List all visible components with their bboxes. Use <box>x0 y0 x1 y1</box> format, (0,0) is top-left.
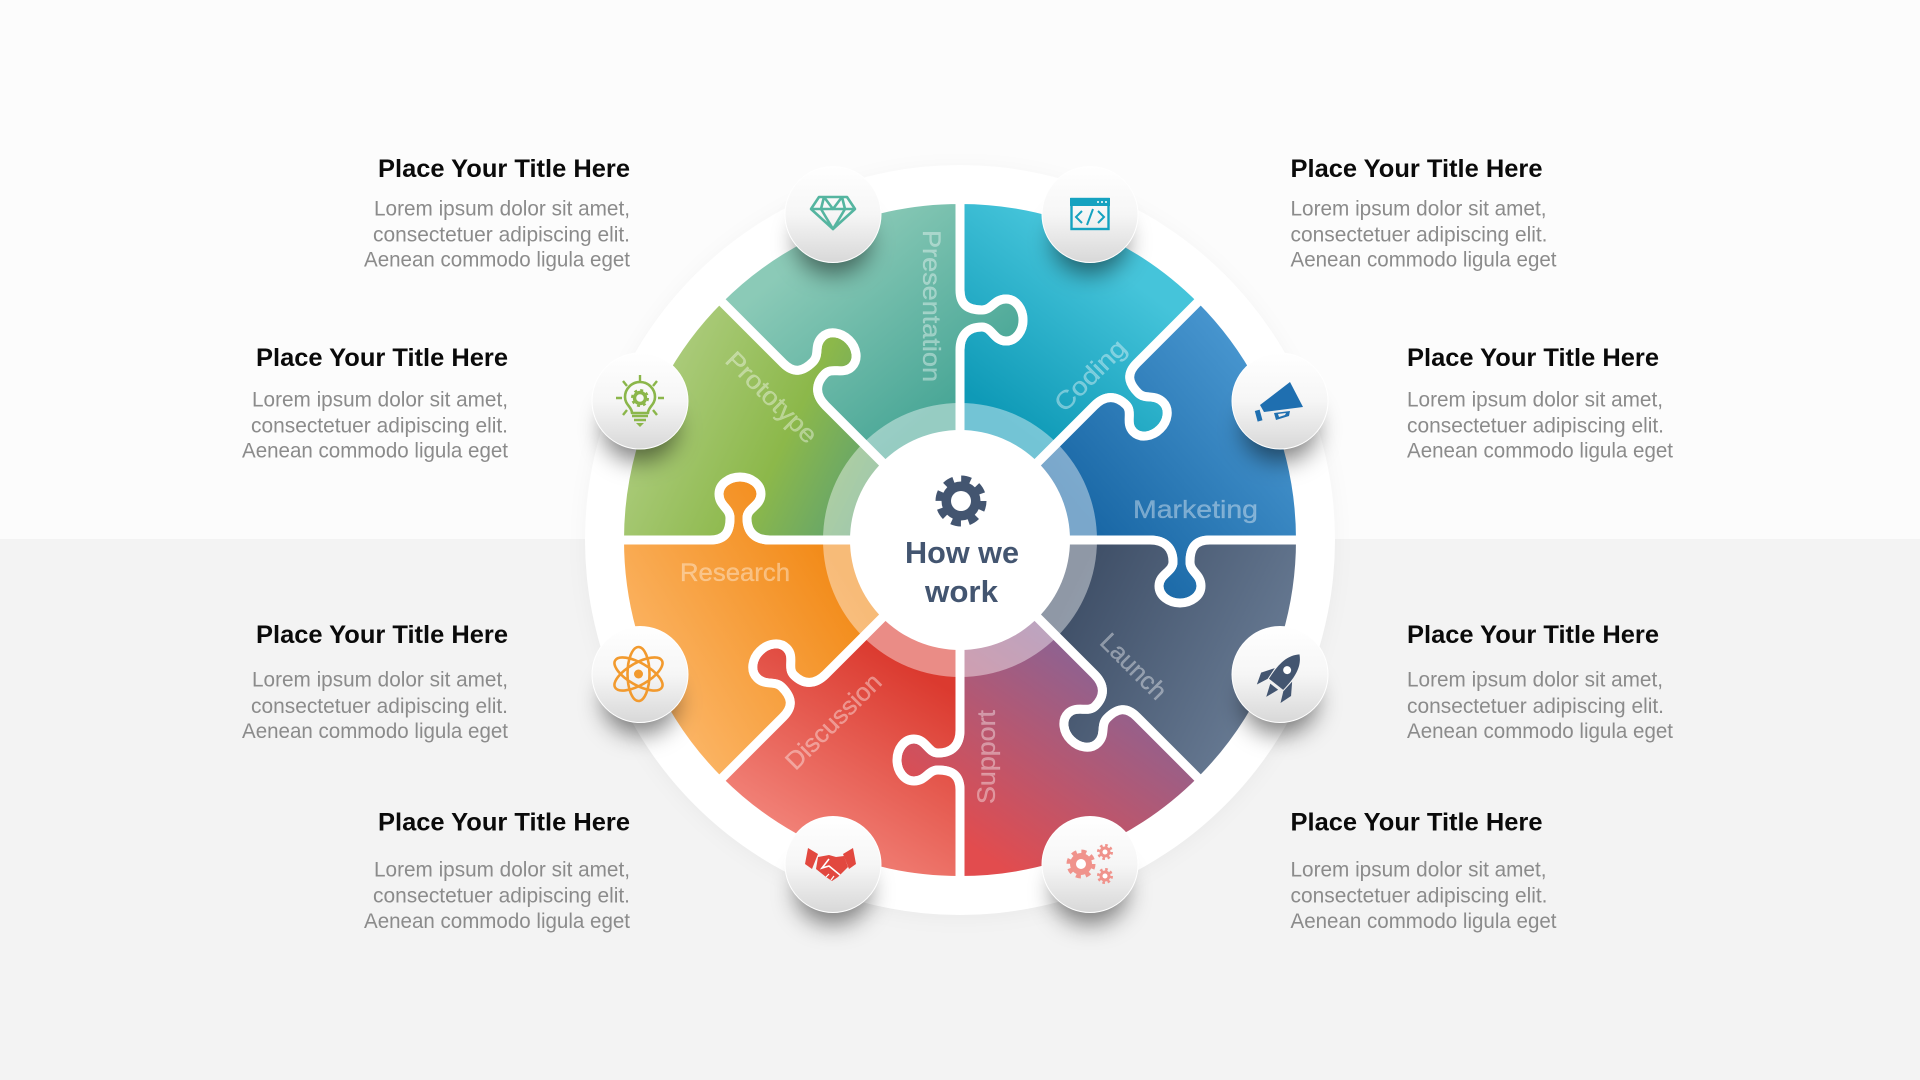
text block: upper left: Lorem ipsum dolor sit amet, <box>252 388 508 412</box>
text block: upper right: Place Your Title Here <box>1407 344 1659 372</box>
button: rocket <box>1232 626 1328 734</box>
text block: bottom left: consectetuer adipiscing elit. <box>373 884 630 908</box>
button: megaphone <box>1232 353 1328 461</box>
icon: megaphone <box>1255 382 1303 422</box>
icon: rocket <box>1251 643 1314 709</box>
text block: upper right: Aenean commodo ligula eget <box>1407 440 1673 462</box>
text block: top left: Place Your Title Here <box>378 155 630 183</box>
text block: bottom right <box>1290 808 1557 933</box>
text block: bottom right: consectetuer adipiscing elit. <box>1290 884 1548 908</box>
text block: lower left <box>242 621 508 743</box>
icon: handshake <box>805 848 856 881</box>
button: atom <box>592 626 688 734</box>
text block: lower left: Place Your Title Here <box>256 621 508 649</box>
button: handshake <box>785 816 881 924</box>
button: light bulb <box>592 353 688 461</box>
piece: support <box>790 540 1201 951</box>
text block: bottom left: Place Your Title Here <box>378 808 630 836</box>
text block: bottom left: Lorem ipsum dolor sit amet, <box>374 858 630 882</box>
text block: lower right: consectetuer adipiscing elit. <box>1407 695 1664 718</box>
text block: lower right: Aenean commodo ligula eget <box>1407 720 1673 743</box>
button: diamond <box>785 166 881 274</box>
piece: launch <box>960 540 1300 781</box>
piece: research <box>549 370 960 781</box>
text block: bottom left: Aenean commodo ligula eget <box>364 910 630 933</box>
text block: bottom left <box>364 808 630 933</box>
text block: top right: Place Your Title Here <box>1290 155 1543 183</box>
text block: top left: Lorem ipsum dolor sit amet, <box>374 198 630 220</box>
text block: upper right <box>1407 344 1673 462</box>
text block: bottom right: Place Your Title Here <box>1290 808 1543 836</box>
center hub: work <box>924 574 999 609</box>
label: marketing: Marketing <box>1133 496 1258 524</box>
label: support: Support <box>973 710 1001 804</box>
text block: top right <box>1290 155 1557 272</box>
text block: upper right: consectetuer adipiscing elit. <box>1407 414 1664 438</box>
piece: prototype <box>620 299 960 540</box>
label: discussion: Discussion <box>780 668 887 775</box>
text block: bottom right: Lorem ipsum dolor sit amet, <box>1290 858 1546 882</box>
piece: coding <box>960 200 1201 540</box>
text block: lower right: Lorem ipsum dolor sit amet, <box>1407 668 1663 692</box>
text block: top right: Aenean commodo ligula eget <box>1290 248 1557 272</box>
text block: top right: Lorem ipsum dolor sit amet, <box>1290 198 1546 220</box>
text block: upper left: Place Your Title Here <box>256 344 508 372</box>
text block: bottom right: Aenean commodo ligula eget <box>1290 910 1557 933</box>
piece: marketing <box>960 299 1371 710</box>
outer white ring <box>585 165 1335 917</box>
button: gears <box>1042 816 1138 924</box>
icon: code window <box>1070 198 1110 229</box>
text block: lower right <box>1407 621 1673 743</box>
icon: atom <box>610 647 667 701</box>
icon: hub gear <box>939 479 983 523</box>
icon: diamond <box>811 197 855 229</box>
background: upper half <box>0 0 1920 539</box>
text block: upper left <box>242 344 508 462</box>
text block: lower left: Aenean commodo ligula eget <box>242 720 508 743</box>
text block: top left: consectetuer adipiscing elit. <box>373 224 630 246</box>
text block: lower left: consectetuer adipiscing elit. <box>251 695 508 718</box>
text block: upper left: consectetuer adipiscing elit. <box>251 414 508 438</box>
background: lower half <box>0 539 1920 1080</box>
icon: gears <box>1068 846 1112 882</box>
hub title: How we <box>905 535 1019 570</box>
label: launch: Launch <box>1094 628 1172 706</box>
label: presentation: Presentation <box>917 230 945 382</box>
inner translucent ring <box>823 403 1097 677</box>
text block: top left: Aenean commodo ligula eget <box>364 248 630 272</box>
text block: lower left: Lorem ipsum dolor sit amet, <box>252 668 508 692</box>
piece labels <box>680 230 1258 804</box>
label: coding: Coding <box>1049 334 1132 417</box>
button: code window <box>1042 166 1138 274</box>
label: research: Research <box>680 559 790 587</box>
text block: top left <box>364 155 630 272</box>
puzzle wheel <box>549 129 1371 951</box>
piece: discussion <box>719 540 960 880</box>
text block: top right: consectetuer adipiscing elit. <box>1290 224 1548 246</box>
text block: upper left: Aenean commodo ligula eget <box>242 440 508 462</box>
label: prototype: Prototype <box>720 346 823 449</box>
icon: light bulb <box>616 375 664 427</box>
center hub <box>850 430 1070 650</box>
text block: upper right: Lorem ipsum dolor sit amet, <box>1407 388 1663 412</box>
piece: presentation <box>719 129 1130 540</box>
text block: lower right: Place Your Title Here <box>1407 621 1659 649</box>
